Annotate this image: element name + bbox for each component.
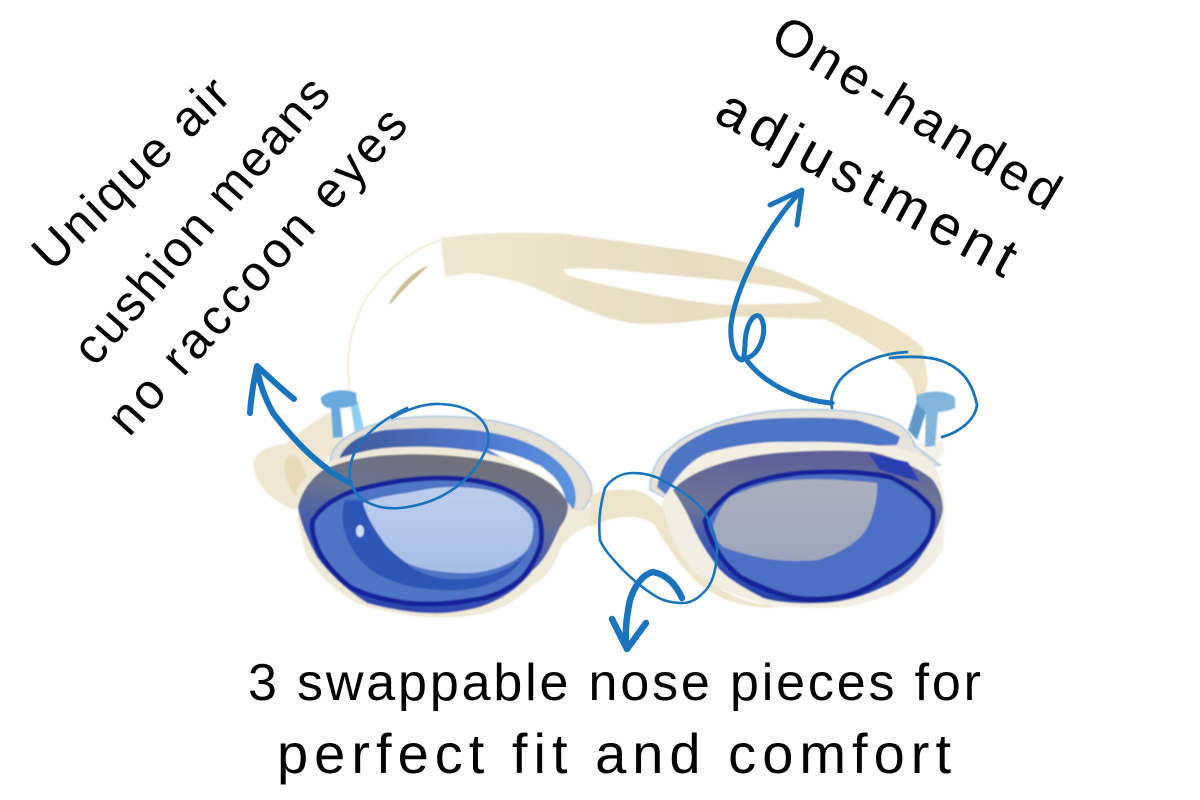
lens housing — [298, 454, 568, 613]
right eyepiece — [650, 410, 945, 608]
right strap clip — [908, 392, 955, 466]
lens glint — [356, 525, 364, 537]
label: perfect fit and comfort — [277, 722, 951, 785]
label: 3 swappable nose pieces for — [248, 654, 981, 712]
glare patch — [868, 453, 920, 482]
blue band — [340, 428, 576, 526]
clear upper frame — [330, 416, 592, 530]
nose bridge — [590, 490, 780, 608]
label: cushion means — [61, 65, 341, 375]
callout: one-handed adjustment annotation — [706, 5, 1071, 437]
label: adjustment — [706, 75, 1028, 289]
dark lens ring — [312, 478, 542, 604]
label: Unique air — [21, 66, 241, 281]
photo: swim goggles — [253, 233, 955, 618]
circle highlight — [831, 352, 977, 437]
callout: air cushion annotation — [21, 65, 488, 508]
label: no raccoon eyes — [96, 96, 418, 445]
blue band — [657, 418, 900, 500]
light lens centre — [363, 487, 533, 573]
clear upper frame — [650, 410, 940, 500]
left eyepiece — [297, 416, 604, 618]
gray lens centre — [712, 479, 877, 561]
arrow — [612, 572, 682, 649]
goggle strap — [345, 233, 928, 402]
label: One-handed — [762, 5, 1071, 222]
cream strip — [662, 442, 945, 608]
left strap clip — [321, 390, 364, 438]
left wing of frame — [253, 412, 345, 510]
white gap — [487, 449, 566, 520]
circle highlight — [350, 404, 488, 508]
arrow — [731, 190, 832, 403]
label — [248, 654, 981, 785]
label — [706, 5, 1071, 289]
circle highlight — [599, 473, 717, 603]
lens housing — [673, 450, 943, 603]
arrow — [250, 366, 350, 483]
dark lens ring — [705, 472, 933, 599]
callout: nose piece annotation — [248, 473, 981, 785]
mid blue band — [342, 500, 527, 590]
cream body — [297, 447, 604, 618]
